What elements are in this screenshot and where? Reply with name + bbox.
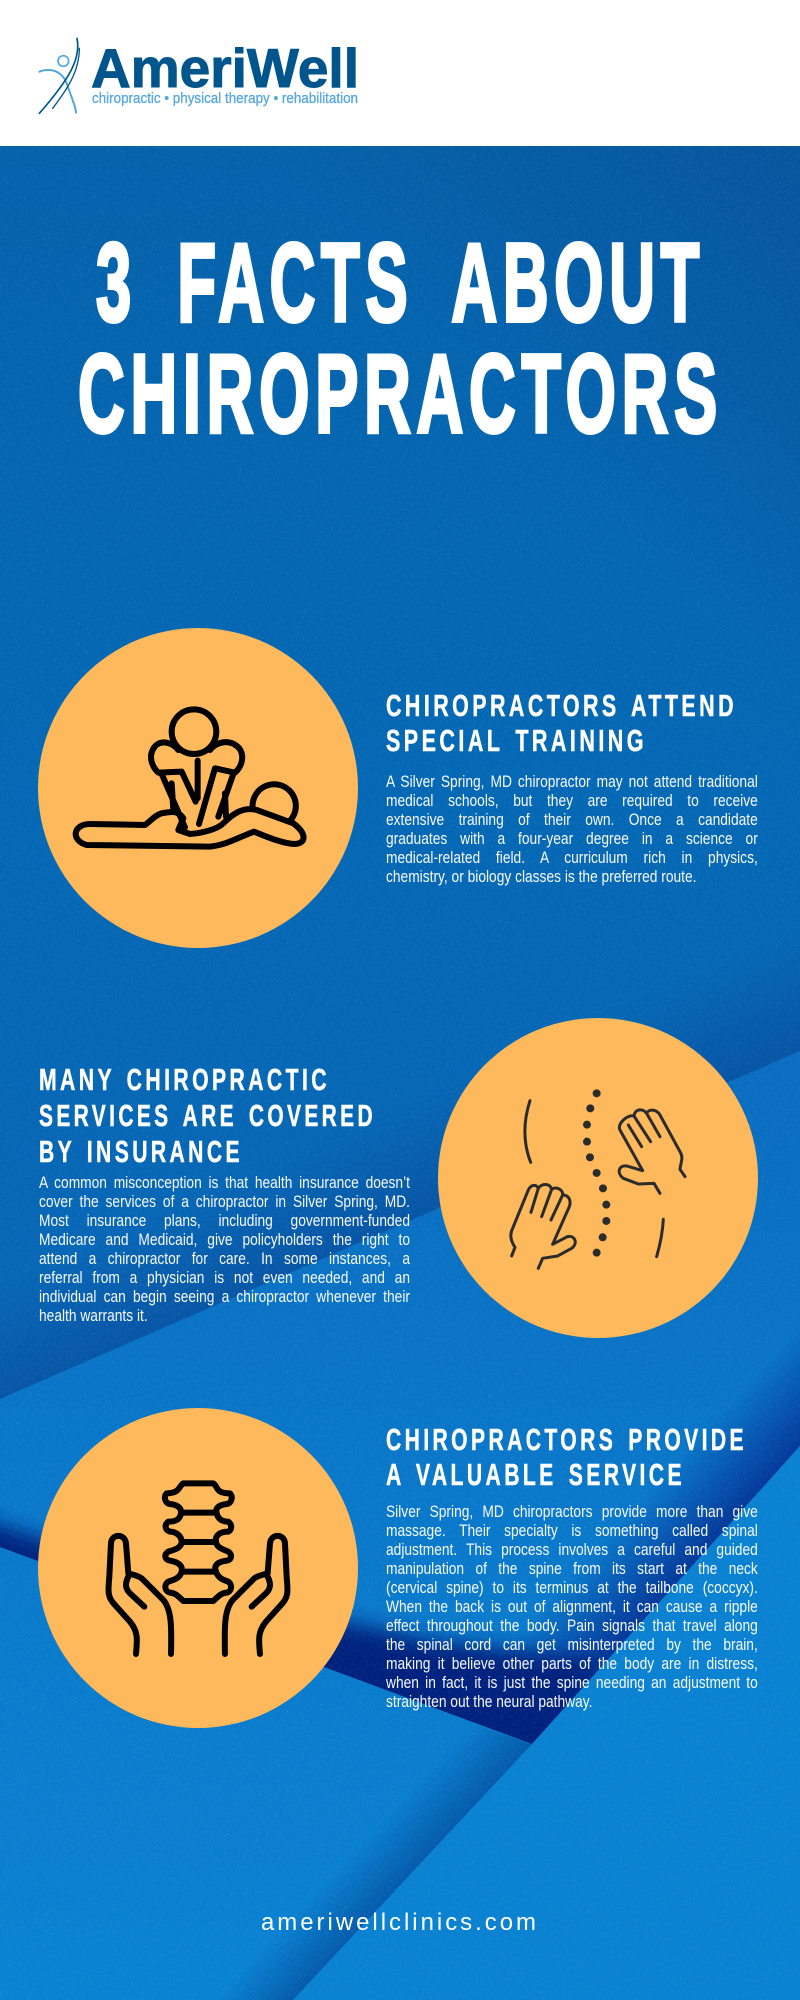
heading: MANY CHIROPRACTIC [39,1062,330,1097]
heading: SPECIAL TRAINING [386,723,647,758]
body text: adjustment. This process involves a careful and guided [386,1540,758,1559]
body text: health warrants it. [39,1306,148,1325]
heading: SERVICES ARE COVERED [39,1098,376,1133]
icon: hands holding spine [38,1408,358,1728]
body text: A Silver Spring, MD chiropractor may not attend traditional [386,772,758,791]
body text: Silver Spring, MD chiropractors provide more than give [386,1502,758,1521]
body text: A common misconception is that health insurance doesn’t [39,1173,410,1192]
heading: BY INSURANCE [39,1134,243,1169]
body text: chemistry, or biology classes is the preferred route. [386,867,696,886]
body text: attend a chiropractor for care. In some instances, a [39,1249,410,1268]
body text [386,772,758,886]
logo icon: figure [39,38,79,113]
body text: effect throughout the body. Pain signals that travel along [386,1616,758,1635]
logo tagline: chiropractic • physical therapy • rehabilitation [92,90,358,107]
footer: website: ameriwellclinics.com [261,1909,539,1936]
body text: When the back is out of alignment, it can cause a ripple [386,1597,758,1616]
body text: medical-related field. A curriculum rich in physics, [386,848,758,867]
body text: manipulation of the spine from its start at the neck [386,1559,758,1578]
body text: medical schools, but they are required to receive [386,791,758,810]
logo: AmeriWell [38,37,359,114]
body text: referral from a physician is not even needed, and an [39,1268,410,1287]
body text: individual can begin seeing a chiropractor whenever their [39,1287,410,1306]
panel: insurance coverage [39,1018,758,1338]
panel: special training [38,628,758,948]
heading [386,1422,747,1492]
icon: chiropractor treating patient [38,628,358,948]
body text: when in fact, it is just the spine needing an adjustment to [386,1673,758,1692]
body text: cover the services of a chiropractor in Silver Spring, MD. [39,1192,410,1211]
body text [386,1502,758,1711]
body text: Medicare and Medicaid, give policyholders the right to [39,1230,410,1249]
heading [386,688,737,758]
body text: the spinal cord can get misinterpreted by the brain, [386,1635,758,1654]
body text: graduates with a four-year degree in a science or [386,829,758,848]
body text: massage. Their specialty is something called spinal [386,1521,758,1540]
body text [39,1173,410,1325]
panel: valuable service [38,1408,758,1728]
body text: straighten out the neural pathway. [386,1692,592,1711]
heading [39,1062,376,1169]
logo wordmark: AmeriWell [91,37,359,99]
title [78,221,723,456]
body text: Most insurance plans, including government-funded [39,1211,410,1230]
header: logo band [0,0,800,146]
body text: extensive training of their own. Once a candidate [386,810,758,829]
icon: hands and spine [438,1018,758,1338]
body text: making it believe other parts of the body are in distress, [386,1654,758,1673]
body text: (cervical spine) to its terminus at the tailbone (coccyx). [386,1578,758,1597]
